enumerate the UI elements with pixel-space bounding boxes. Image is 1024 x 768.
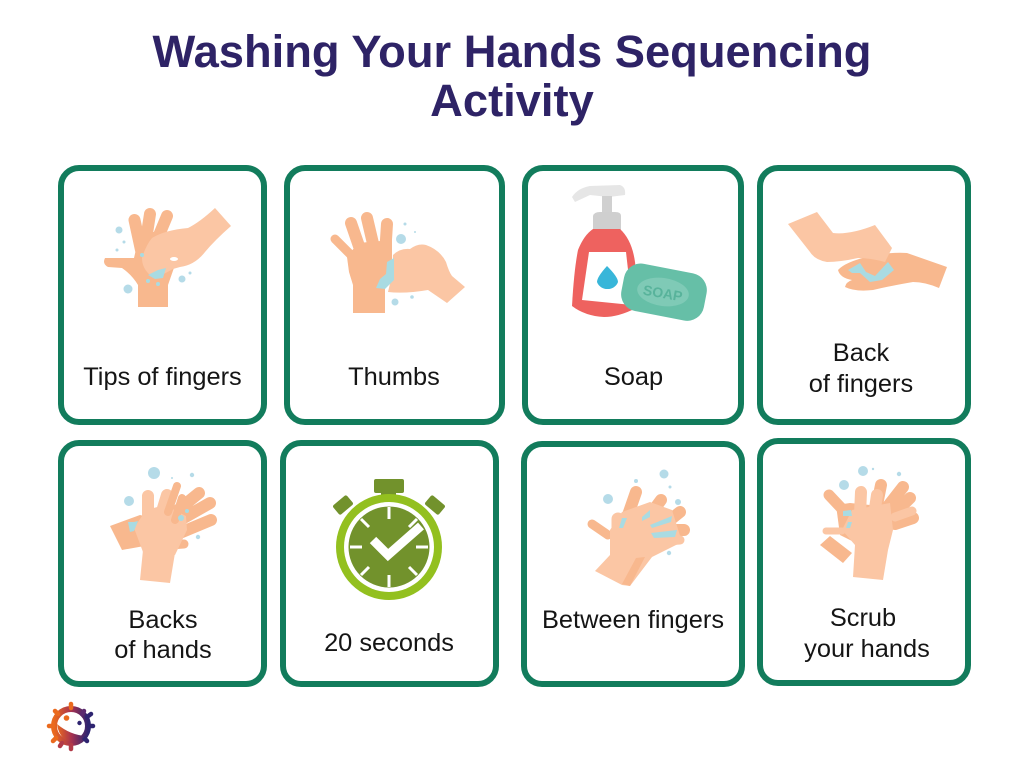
panel: tips of fingers — [61, 168, 264, 422]
panel: thumbs — [287, 168, 502, 422]
label: Back — [833, 339, 890, 367]
icon: soap dispenser and bar: SOAP — [642, 282, 684, 304]
title: Activity — [430, 75, 594, 126]
panel: 20 seconds — [283, 443, 496, 684]
panel: backs of hands — [61, 443, 264, 684]
label — [809, 339, 913, 398]
label — [114, 606, 212, 664]
label: Scrub — [830, 604, 896, 632]
icon: hands washing finger tips — [104, 208, 231, 307]
label: your hands — [804, 635, 930, 663]
icon: stopwatch with check mark — [332, 479, 446, 600]
icon: hands scrubbing — [820, 466, 913, 580]
title: Washing Your Hands Sequencing — [153, 26, 871, 77]
icon: hands washing thumbs — [335, 218, 465, 313]
label: Soap — [604, 363, 663, 391]
icon: hands washing backs of hands — [110, 467, 211, 583]
label: Thumbs — [348, 363, 440, 391]
label: of hands — [114, 636, 212, 664]
label: Backs — [128, 606, 198, 634]
label: 20 seconds — [324, 629, 454, 657]
label: of fingers — [809, 370, 913, 398]
label: Between fingers — [542, 606, 724, 634]
panel: soap — [525, 168, 741, 422]
panel: back of fingers — [760, 168, 968, 422]
panel: between fingers — [524, 444, 742, 684]
label — [804, 604, 930, 663]
icon: logo — [49, 704, 93, 749]
icon: hands washing backs of fingers — [788, 212, 947, 291]
panel: scrub your hands — [760, 441, 968, 683]
title — [153, 26, 871, 126]
icon: soap dispenser and bar — [572, 185, 710, 324]
label: Tips of fingers — [83, 363, 242, 391]
icon: hands washing between fingers — [592, 470, 684, 586]
